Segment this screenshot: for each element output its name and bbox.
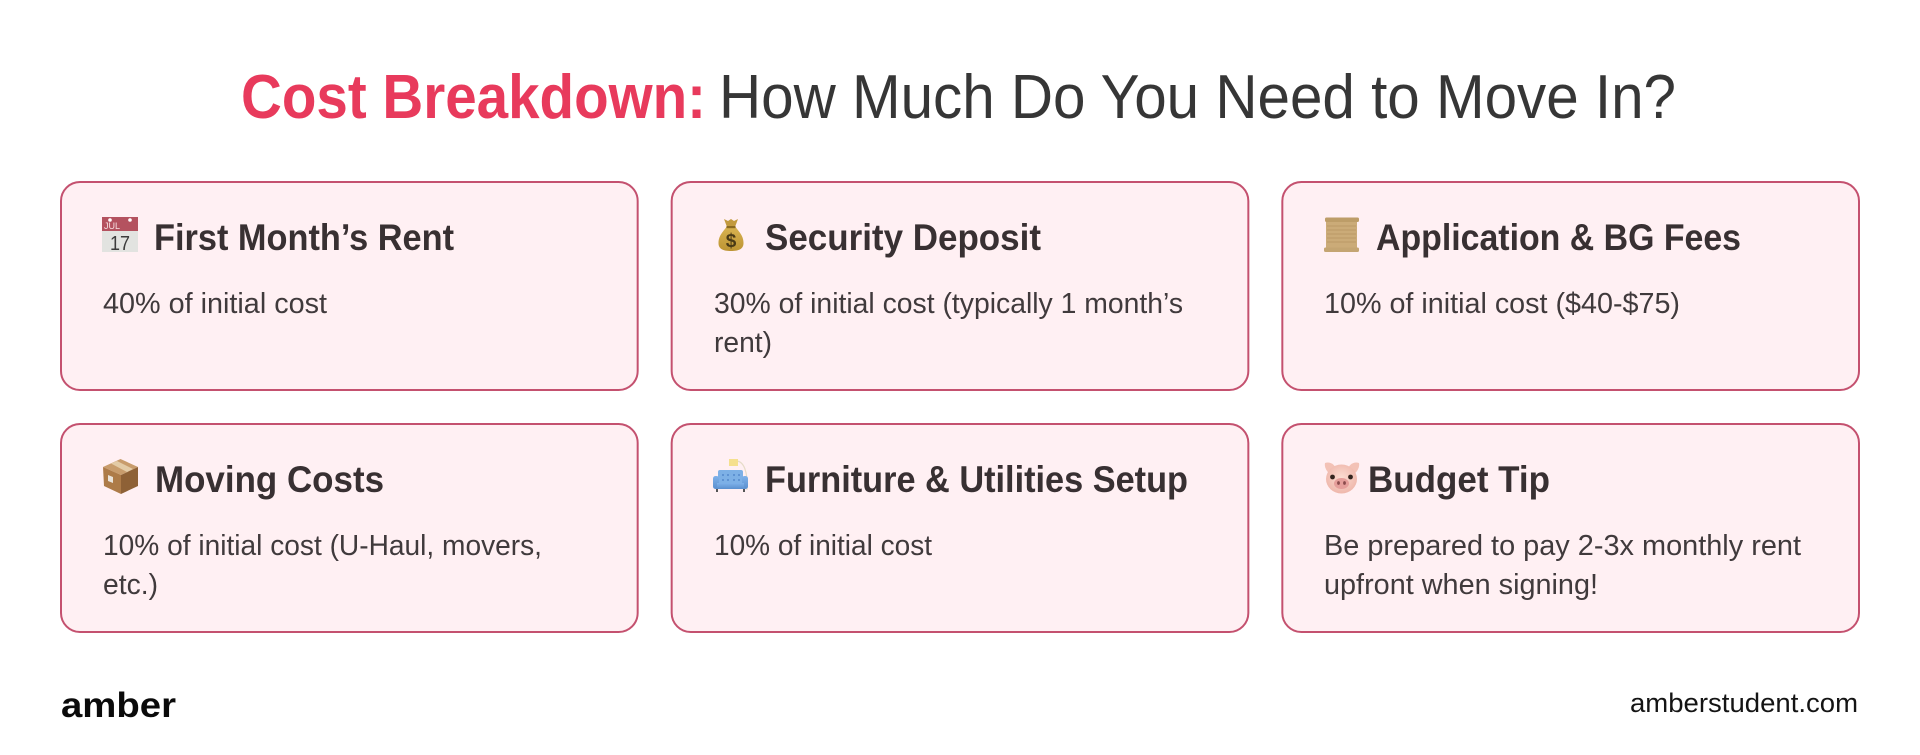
text: furniture detail: 10% of initial cost	[714, 530, 932, 562]
panel: security deposit	[672, 182, 1248, 390]
text: budget tip detail: Be prepared to pay 2-3x monthly rent	[1324, 530, 1801, 562]
heading: first month's rent: First Month’s Rent	[154, 217, 454, 258]
footer url: amberstudent.com	[1630, 688, 1858, 718]
heading: budget tip: Budget Tip	[1368, 459, 1550, 500]
text: first month's rent detail: 40% of initial cost	[103, 288, 327, 320]
icon: pig face	[1325, 462, 1359, 494]
logo: amber: amber	[61, 686, 176, 725]
text: moving costs detail: etc.)	[103, 569, 158, 601]
icon: money bag	[718, 219, 744, 252]
panel: furniture and utilities setup	[672, 424, 1248, 632]
text: moving costs detail	[103, 530, 542, 601]
text: budget tip detail	[1324, 530, 1801, 601]
panel: moving costs	[61, 424, 638, 632]
panel: first month's rent	[61, 182, 638, 390]
title: How Much Do You Need to Move In?	[719, 63, 1676, 132]
icon: calendar	[102, 217, 138, 255]
title	[241, 63, 1676, 132]
panel: budget tip	[1282, 424, 1859, 632]
icon: cardboard box	[103, 459, 138, 494]
text: security deposit detail: 30% of initial cost (typically 1 month’s	[714, 288, 1183, 320]
heading: application and BG fees: Application & BG Fees	[1376, 217, 1741, 258]
text: budget tip detail: upfront when signing!	[1324, 569, 1598, 601]
icon: calendar: 17	[110, 233, 130, 255]
text: moving costs detail: 10% of initial cost (U-Haul, movers,	[103, 530, 542, 562]
icon: calendar: JUL	[104, 221, 120, 231]
heading: security deposit: Security Deposit	[765, 217, 1041, 258]
text: security deposit detail: rent)	[714, 327, 772, 359]
title: Cost Breakdown:	[241, 63, 706, 132]
heading: furniture and utilities setup: Furniture & Utilities Setup	[765, 459, 1188, 500]
panel: application and BG fees	[1282, 182, 1859, 390]
icon: money bag: $	[726, 231, 737, 252]
icon: couch and lamp	[713, 459, 748, 492]
text: application fee detail: 10% of initial cost ($40-$75)	[1324, 288, 1680, 320]
icon: scroll	[1324, 218, 1359, 252]
heading: moving costs: Moving Costs	[155, 459, 384, 500]
text: security deposit detail	[714, 288, 1183, 359]
